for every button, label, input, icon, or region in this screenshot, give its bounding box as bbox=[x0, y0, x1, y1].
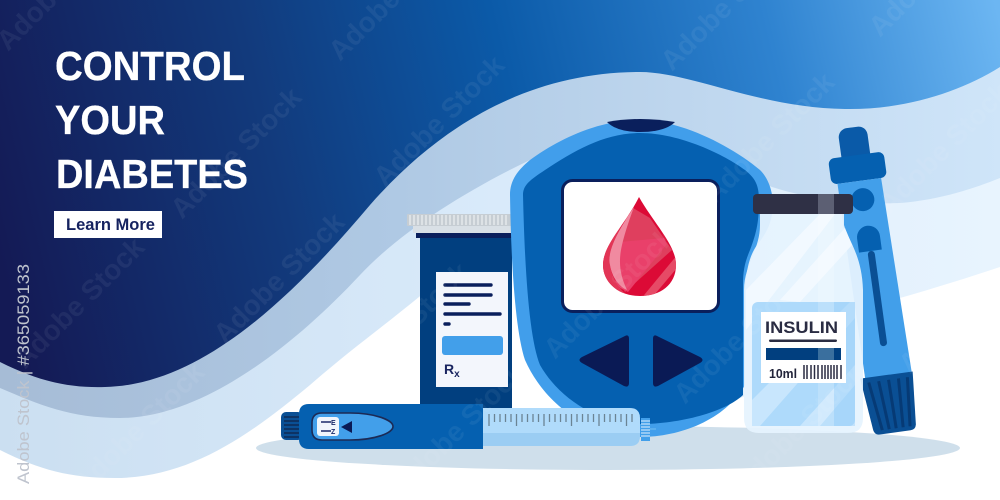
pen cartridge bbox=[483, 408, 640, 446]
bottle label: R bbox=[444, 361, 454, 377]
watermarks: Adobe Stock bbox=[164, 81, 308, 224]
insulin pen bbox=[281, 404, 656, 449]
vial label: INSULIN bbox=[765, 319, 838, 337]
bottle label bbox=[436, 272, 508, 387]
button: learn more bbox=[54, 211, 162, 238]
title: DIABETES bbox=[56, 151, 248, 197]
bottle label: x bbox=[454, 369, 460, 380]
title bbox=[55, 43, 248, 197]
watermarks: Adobe Stock bbox=[667, 266, 811, 409]
lancing pen bbox=[824, 124, 922, 436]
watermarks: Adobe Stock bbox=[387, 356, 531, 499]
meter screen bbox=[562, 180, 718, 312]
vial label bbox=[761, 312, 846, 383]
ground shadow bbox=[256, 426, 960, 470]
title: YOUR bbox=[55, 97, 165, 143]
watermarks: Adobe Stock bbox=[537, 221, 681, 364]
side credit text: Adobe Stock | #365059133 bbox=[14, 264, 33, 484]
watermarks: Adobe Stock bbox=[697, 66, 841, 209]
pen dose window: Z bbox=[331, 429, 336, 436]
vial cap bbox=[753, 194, 853, 214]
watermarks: Adobe Stock bbox=[207, 206, 351, 349]
title: CONTROL bbox=[55, 43, 245, 89]
watermarks: Adobe Stock bbox=[727, 356, 871, 499]
background wave: dark gradient bbox=[0, 0, 1000, 387]
watermarks: Adobe Stock bbox=[367, 49, 511, 192]
watermarks: Adobe Stock bbox=[67, 356, 211, 499]
button: learn more: Learn More bbox=[66, 215, 155, 234]
watermarks: Adobe Stock bbox=[332, 256, 476, 399]
glucose meter bbox=[510, 119, 773, 437]
meter buttons bbox=[580, 335, 629, 387]
vial label: 10ml bbox=[769, 367, 797, 381]
pen dose window bbox=[312, 413, 393, 440]
icon: blood drop bbox=[603, 197, 676, 296]
pen needle tip bbox=[641, 418, 656, 441]
watermarks: Adobe Stock bbox=[7, 231, 151, 374]
pen dose window: E bbox=[331, 420, 336, 427]
pill bottle bbox=[407, 214, 512, 408]
insulin vial bbox=[744, 194, 863, 433]
